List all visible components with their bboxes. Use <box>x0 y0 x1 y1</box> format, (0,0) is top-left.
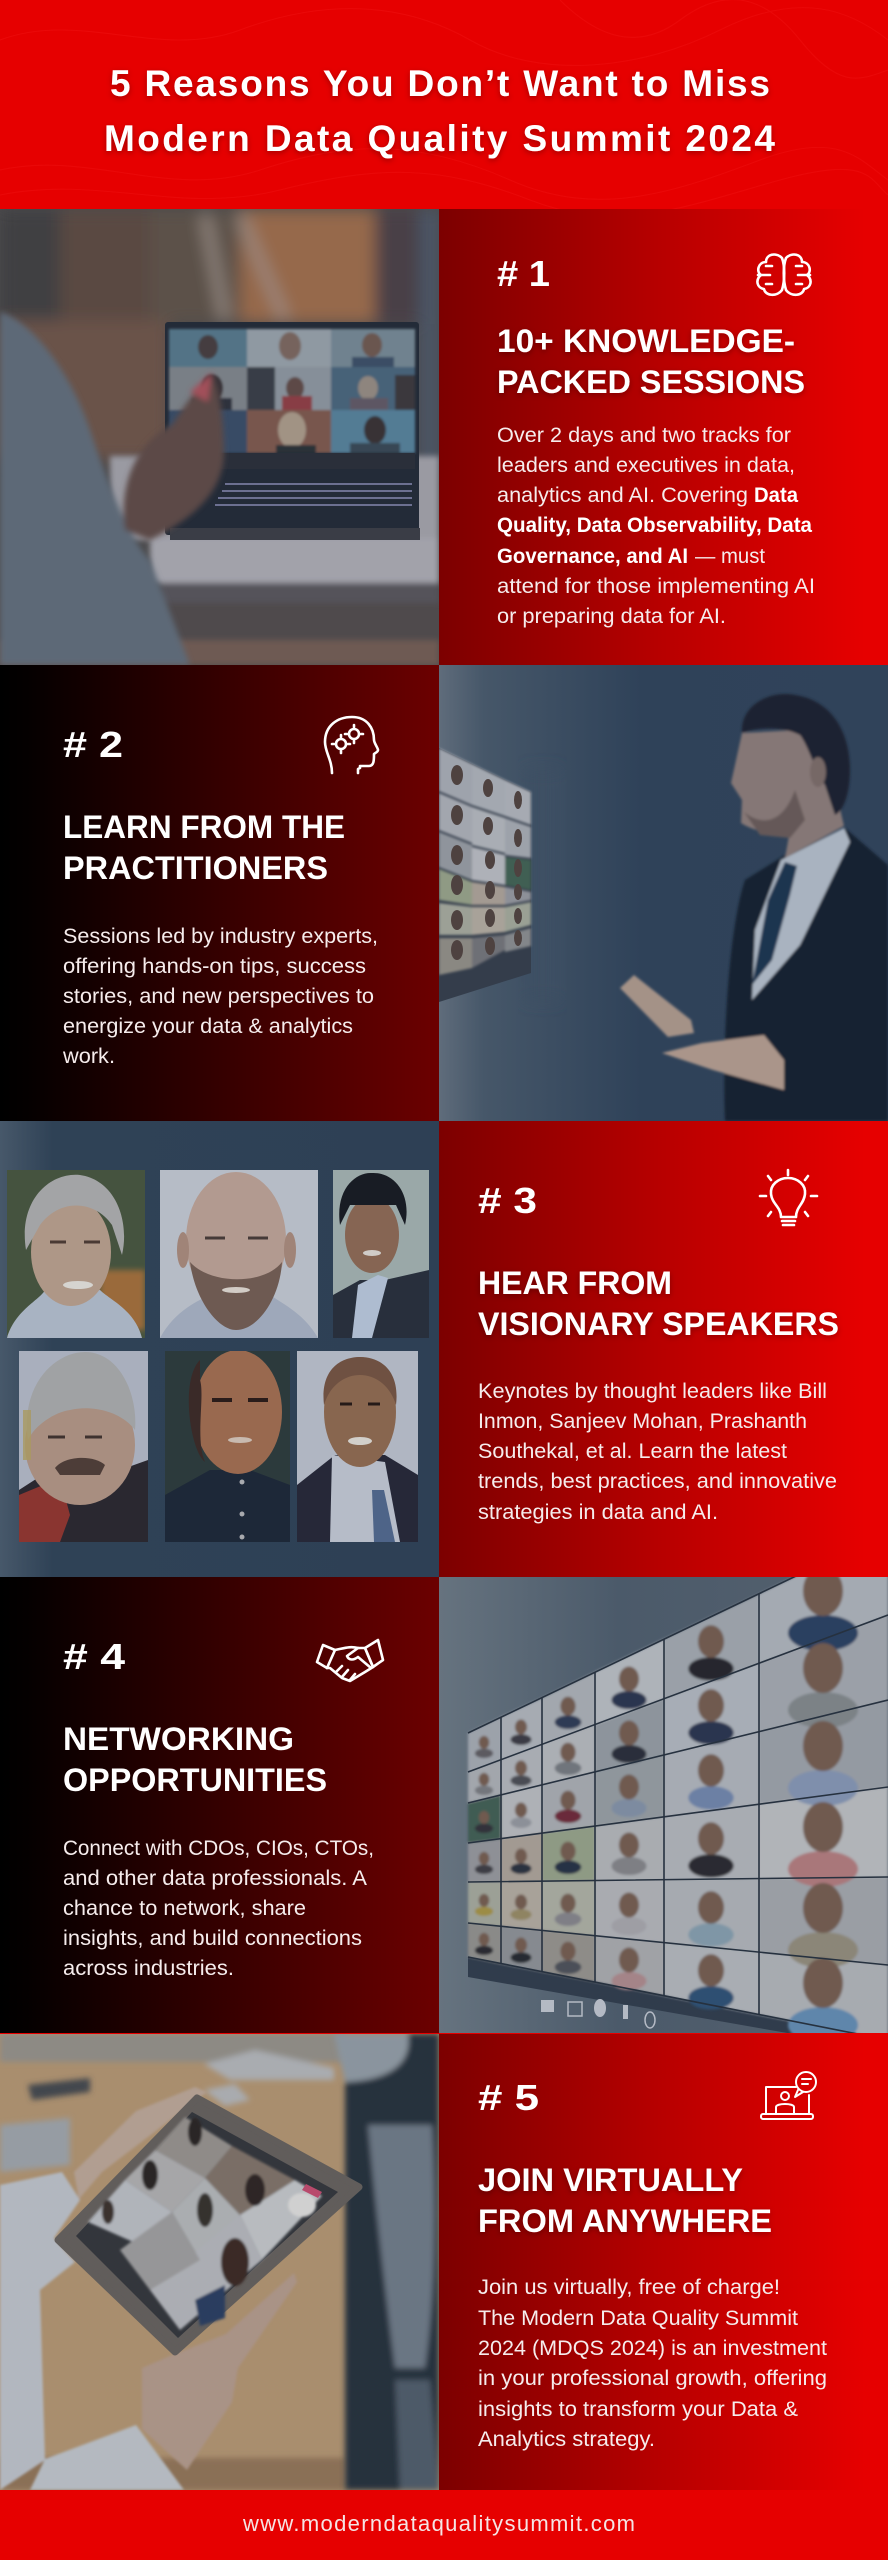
body text: chance to network, share <box>63 1897 306 1920</box>
speaker 3 <box>333 1170 429 1338</box>
panel: reason 1 <box>439 209 888 665</box>
body text: insights to transform your Data & <box>478 2398 798 2421</box>
number 4: # 4 <box>63 1636 125 1677</box>
body text: Over 2 days and two tracks for <box>497 424 791 447</box>
body text <box>62 925 378 1068</box>
wall tiles <box>468 1532 888 2043</box>
body text: analytics and AI. Covering <box>497 484 748 507</box>
person and hand <box>0 312 224 665</box>
body text: Southekal, et al. Learn the latest <box>478 1440 787 1463</box>
body text <box>497 424 815 628</box>
number 1: # 1 <box>497 253 550 294</box>
body text: Connect with CDOs, CIOs, CTOs, <box>63 1837 374 1860</box>
body text: trends, best practices, and innovative <box>478 1470 837 1493</box>
body text: insights, and build connections <box>63 1927 362 1950</box>
heading: VISIONARY SPEAKERS <box>478 1306 839 1342</box>
tablet <box>58 2098 359 2352</box>
photo: speakers grid <box>0 1121 439 1577</box>
body text: work. <box>62 1045 115 1068</box>
body text <box>63 1837 374 1980</box>
wall grid lines <box>468 1532 888 2040</box>
body text: Keynotes by thought leaders like Bill <box>478 1380 827 1403</box>
heading: JOIN VIRTUALLY <box>478 2162 743 2198</box>
body text: Sessions led by industry experts, <box>63 925 378 948</box>
body text: strategies in data and AI. <box>478 1501 718 1524</box>
body text: Governance, and AI <box>497 545 688 568</box>
body text: or preparing data for AI. <box>497 605 726 628</box>
panel: reason 3 <box>439 1121 888 1577</box>
heading <box>478 2162 772 2239</box>
title: 5 Reasons You Don’t Want to Miss <box>110 63 770 104</box>
laptop <box>165 322 420 540</box>
number 5: # 5 <box>478 2077 539 2118</box>
photo: laptop video call <box>0 209 439 665</box>
website url: www.moderndataqualitysummit.com <box>242 2511 635 2536</box>
wall toolbar icons <box>541 1999 655 2028</box>
title: Modern Data Quality Summit 2024 <box>104 118 775 159</box>
heading: OPPORTUNITIES <box>63 1762 327 1798</box>
speaker 6 <box>297 1351 418 1542</box>
heading: NETWORKING <box>63 1721 294 1757</box>
photo: perspective video wall <box>439 1577 888 2033</box>
number 3: # 3 <box>478 1180 537 1221</box>
speaker 4 <box>19 1351 148 1542</box>
wall toolbar <box>468 1957 888 2034</box>
body text: Quality, Data Observability, Data <box>497 514 812 537</box>
title <box>104 63 775 159</box>
heading <box>63 809 345 886</box>
heading: PRACTITIONERS <box>63 850 328 886</box>
speaker 5 <box>165 1351 290 1542</box>
body text: offering hands-on tips, success <box>63 955 366 978</box>
body text: in your professional growth, offering <box>478 2367 827 2390</box>
speaker 1 <box>7 1170 145 1338</box>
photo: presenter and video wall <box>439 665 888 1121</box>
number 2: # 2 <box>63 724 123 765</box>
body text <box>478 2276 827 2451</box>
icon: head with gears <box>325 717 378 773</box>
heading: FROM ANYWHERE <box>478 2203 772 2239</box>
heading <box>497 323 805 400</box>
panel: reason 2 <box>0 665 439 1121</box>
body text: attend for those implementing AI <box>497 575 815 598</box>
heading: LEARN FROM THE <box>63 809 345 845</box>
body text: — must <box>695 545 765 568</box>
body text: and other data professionals. A <box>63 1867 367 1890</box>
heading <box>478 1265 839 1342</box>
video wall <box>439 748 531 1002</box>
table and papers <box>0 2034 345 2490</box>
body text: The Modern Data Quality Summit <box>478 2307 798 2330</box>
body text <box>478 1380 837 1524</box>
body text: Join us virtually, free of charge! <box>478 2276 780 2299</box>
icon: handshake <box>317 1640 383 1681</box>
panel: reason 5 <box>439 2034 888 2490</box>
body text: Inmon, Sanjeev Mohan, Prashanth <box>478 1410 807 1433</box>
chair <box>334 2034 439 2490</box>
body text: leaders and executives in data, <box>497 454 795 477</box>
heading <box>63 1721 327 1798</box>
heading: HEAR FROM <box>478 1265 672 1301</box>
body text: Data <box>754 484 798 507</box>
body text: stories, and new perspectives to <box>63 985 374 1008</box>
people in tiles <box>475 1566 858 2043</box>
body text: 2024 (MDQS 2024) is an investment <box>478 2337 827 2360</box>
heading: PACKED SESSIONS <box>497 364 805 400</box>
icon: brain <box>757 255 811 295</box>
presenter <box>620 694 888 1121</box>
body text: across industries. <box>63 1957 234 1980</box>
body text: energize your data & analytics <box>63 1015 353 1038</box>
heading: 10+ KNOWLEDGE- <box>497 323 795 359</box>
photo: tablet video call <box>0 2034 439 2490</box>
hands and sleeves <box>0 2087 297 2490</box>
icon: light bulb <box>760 1170 817 1225</box>
footer bar <box>0 2490 888 2560</box>
header banner <box>0 0 888 216</box>
speaker 2 <box>160 1170 318 1338</box>
panel: reason 4 <box>0 1577 439 2033</box>
icon: laptop with speech bubble <box>761 2072 816 2119</box>
body text: Analytics strategy. <box>478 2428 655 2451</box>
